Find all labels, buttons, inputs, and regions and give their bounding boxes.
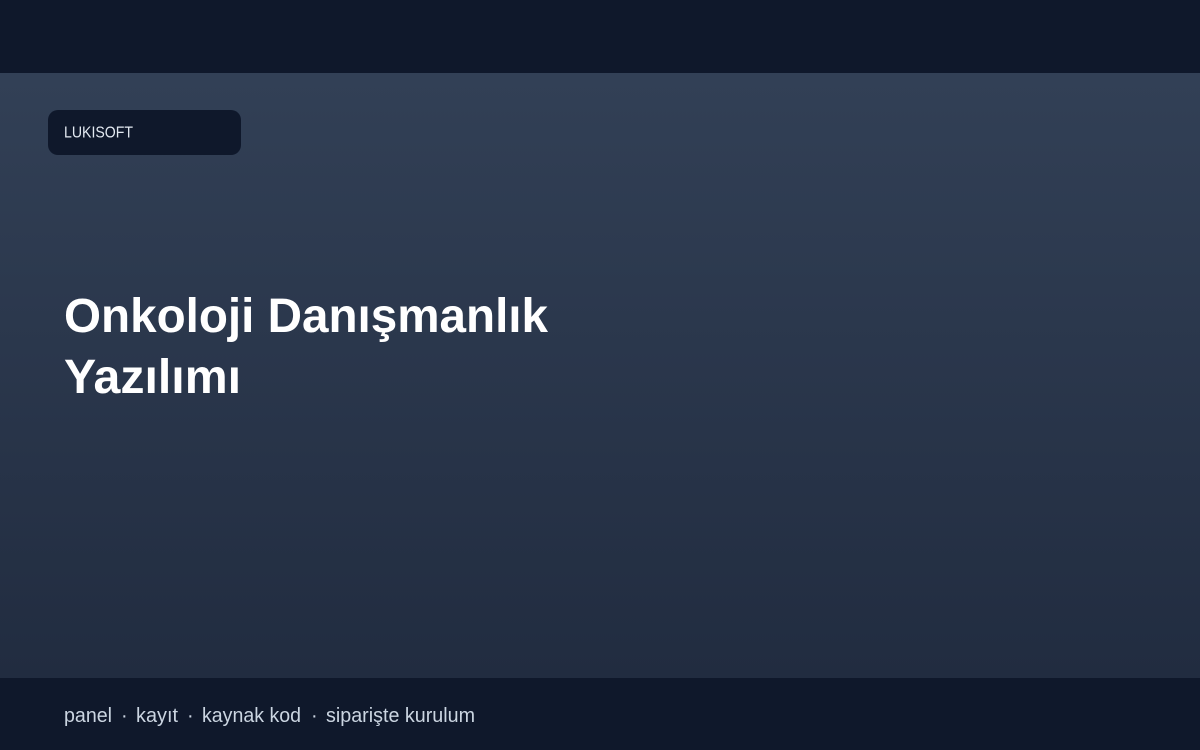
- footer feature list: siparişte kurulum: [326, 705, 475, 727]
- top band: [0, 0, 1200, 73]
- footer feature list: [64, 705, 475, 727]
- title: Yazılımı: [64, 351, 241, 404]
- bottom band: [0, 678, 1200, 750]
- footer feature list: panel: [64, 705, 112, 727]
- footer feature list: kaynak kod: [202, 705, 301, 727]
- badge: LUKISOFT: LUKISOFT: [64, 124, 133, 142]
- footer feature list: ·: [311, 705, 318, 727]
- badge: LUKISOFT: [48, 110, 241, 155]
- title: [64, 290, 548, 404]
- footer feature list: kayıt: [136, 705, 178, 727]
- title: Onkoloji Danışmanlık: [64, 290, 548, 343]
- footer feature list: ·: [187, 705, 194, 727]
- footer feature list: ·: [121, 705, 128, 727]
